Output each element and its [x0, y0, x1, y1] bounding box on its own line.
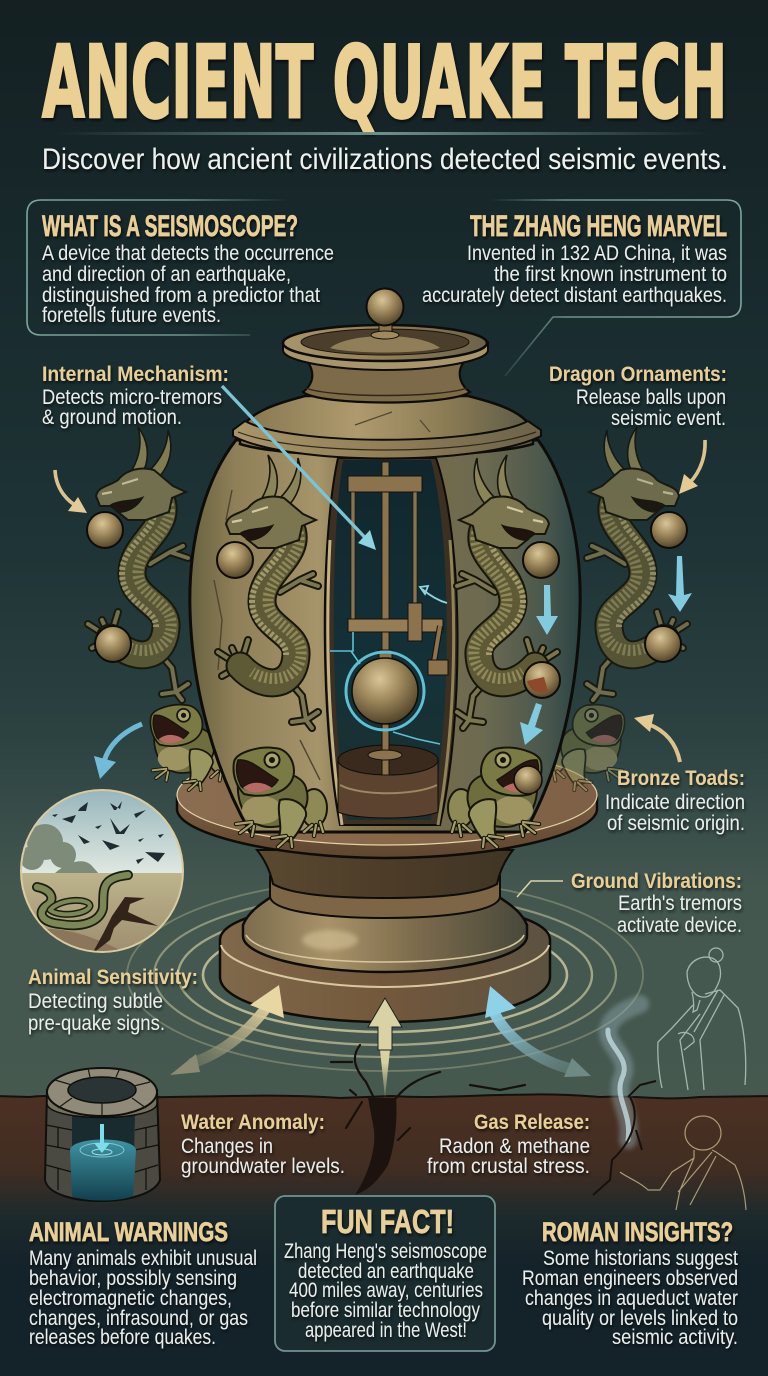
- icon: rising gas smoke: [608, 1004, 640, 1140]
- text: zhang heng description: the first known instrument to: [494, 263, 727, 286]
- arrow: left tan double arrow: [170, 985, 284, 1075]
- device opening: [325, 458, 458, 825]
- illustration: scholar outline: [658, 948, 746, 1090]
- label: ground vibrations: [571, 870, 742, 937]
- heading: what is a seismoscope: WHAT IS A SEISMOSCOPE?: [42, 210, 298, 243]
- label: animal sensitivity: pre-quake signs.: [28, 1012, 165, 1035]
- label: water anomaly: groundwater levels.: [181, 1155, 345, 1178]
- arrow: tan curved to toads: [634, 714, 680, 762]
- text: animal warnings description: Many animals exhibit unusual: [29, 1247, 257, 1270]
- label: bronze toads: [605, 767, 745, 835]
- heading: animal warnings: ANIMAL WARNINGS: [29, 1217, 228, 1247]
- label: internal mechanism: Detects micro-tremors: [42, 386, 222, 409]
- icon: outer dragons: [87, 427, 687, 700]
- label: gas release: Radon & methane: [439, 1135, 590, 1158]
- text: animal warnings description: electromagnetic changes,: [29, 1287, 232, 1310]
- text: animal warnings description: [29, 1247, 257, 1349]
- ground vibration ripples: [127, 879, 643, 1071]
- seismoscope device: [87, 288, 687, 1022]
- icon: back toads: [150, 705, 625, 790]
- label: gas release: [427, 1111, 590, 1178]
- arrow: into internal mechanism: [222, 386, 376, 550]
- label: gas release: Gas Release:: [474, 1111, 590, 1134]
- device knob: [366, 288, 404, 339]
- label: animal sensitivity: Detecting subtle: [28, 990, 163, 1013]
- icon: flock of birds: [52, 801, 165, 864]
- icon: inner dragons: [217, 455, 560, 728]
- label: bronze toads: Bronze Toads:: [617, 767, 745, 790]
- arrow: centre upward arrow: [368, 998, 402, 1098]
- text: zhang heng description: accurately detect distant earthquakes.: [422, 284, 727, 307]
- arrow: right blue double arrow: [485, 986, 591, 1077]
- icon: snake: [37, 875, 128, 925]
- label: internal mechanism: & ground motion.: [42, 406, 182, 429]
- label: water anomaly: [181, 1111, 345, 1178]
- text: fun fact description: 400 miles away, centuries: [289, 1279, 483, 1302]
- text: seismoscope definition: and direction of an earthquake,: [42, 263, 291, 286]
- text: seismoscope definition: [42, 242, 334, 327]
- text: zhang heng description: [422, 242, 727, 307]
- panel: what is a seismoscope: [27, 200, 334, 335]
- text: roman insights description: Some historians suggest: [543, 1247, 738, 1270]
- arrow: curved tan right: [679, 440, 705, 494]
- text: fun fact description: [284, 1240, 487, 1342]
- text: animal warnings description: behavior, possibly sensing: [29, 1267, 237, 1290]
- crack in the earth: [331, 1045, 525, 1195]
- icon: ground crack in inset: [92, 897, 158, 954]
- device lid rim: [283, 325, 488, 370]
- illustration: monk outline: [620, 1116, 746, 1210]
- label: animal sensitivity: Animal Sensitivity:: [28, 966, 198, 989]
- arrow: ground vibrations leader: [517, 881, 563, 897]
- crack at gas vent: [593, 1081, 656, 1195]
- icon: trees: [20, 824, 100, 875]
- inset: animal sensitivity scene: [20, 786, 184, 965]
- text: fun fact description: appeared in the West!: [305, 1319, 467, 1342]
- device shoulder: [233, 396, 541, 458]
- panel: the zhang heng marvel: [422, 200, 741, 376]
- label: ground vibrations: Earth's tremors: [618, 892, 742, 915]
- device neck: [303, 362, 470, 402]
- label: ground vibrations: activate device.: [617, 914, 742, 937]
- text: roman insights description: quality or levels linked to: [542, 1307, 738, 1330]
- device wooden plate: [177, 745, 597, 858]
- panel: roman insights: [522, 1217, 738, 1349]
- text: seismoscope definition: distinguished from a predictor that: [42, 284, 320, 307]
- arrows: blue ball drop arrows: [520, 556, 692, 745]
- label: animal sensitivity: [28, 966, 198, 1035]
- text: roman insights description: [522, 1247, 738, 1349]
- device body: [190, 440, 580, 832]
- label: dragon ornaments: [549, 363, 727, 430]
- label: internal mechanism: [42, 363, 229, 429]
- label: dragon ornaments: Release balls upon: [576, 386, 726, 409]
- text: roman insights description: seismic activity.: [612, 1326, 738, 1349]
- text: seismoscope definition: A device that detects the occurrence: [42, 242, 334, 265]
- label: gas release: from crustal stress.: [427, 1155, 590, 1178]
- label: ground vibrations: Ground Vibrations:: [571, 870, 742, 893]
- panel: fun fact: [275, 1196, 495, 1351]
- text: animal warnings description: releases before quakes.: [29, 1326, 216, 1349]
- text: fun fact description: detected an earthquake: [298, 1260, 474, 1283]
- panel: animal warnings: [29, 1217, 257, 1349]
- label: water anomaly: Changes in: [181, 1135, 273, 1158]
- device internal pendulum mechanism: [330, 462, 448, 818]
- device foot disc: [220, 850, 550, 1022]
- label: bronze toads: of seismic origin.: [607, 812, 745, 835]
- icon: front toads: [233, 748, 542, 847]
- text: fun fact description: Zhang Heng's seismoscope: [284, 1240, 487, 1263]
- text: fun fact description: before similar technology: [291, 1299, 480, 1322]
- label: internal mechanism: Internal Mechanism:: [42, 363, 229, 386]
- label: dragon ornaments: seismic event.: [611, 407, 726, 430]
- text: animal warnings description: changes, infrasound, or gas: [29, 1307, 248, 1330]
- text: seismoscope definition: foretells future events.: [42, 304, 221, 327]
- label: water anomaly: Water Anomaly:: [181, 1111, 325, 1134]
- heading: fun fact: FUN FACT!: [321, 1203, 454, 1240]
- label: bronze toads: Indicate direction: [605, 791, 745, 814]
- label: dragon ornaments: Dragon Ornaments:: [549, 363, 727, 386]
- ground cross-section: [0, 1094, 768, 1376]
- text: zhang heng description: Invented in 132 AD China, it was: [467, 242, 727, 265]
- arrow: blue curved to animals: [94, 724, 142, 779]
- icon: stone well: [45, 1068, 160, 1201]
- arrow: curved tan left: [55, 470, 87, 513]
